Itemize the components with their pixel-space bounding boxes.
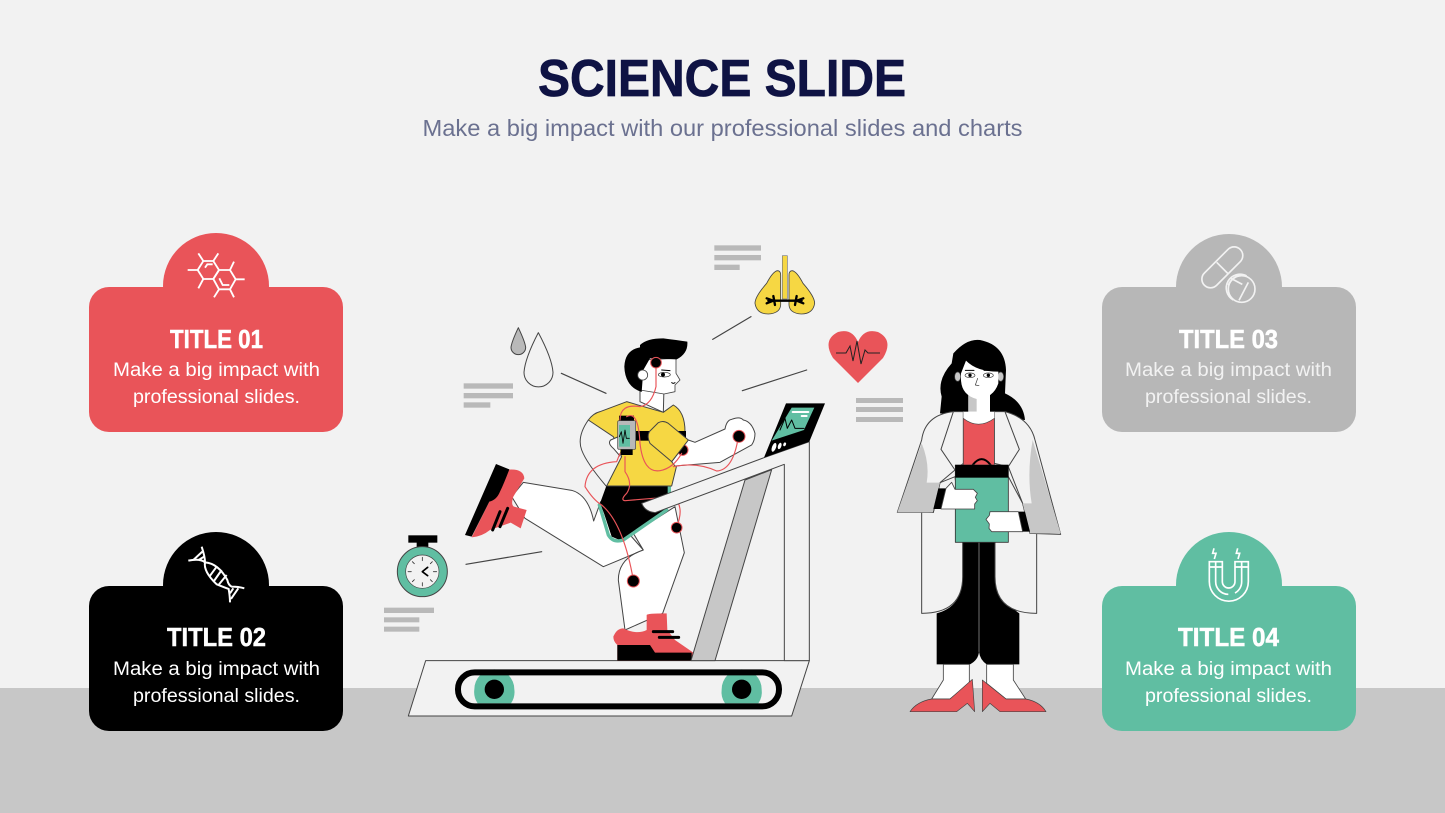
back arm (580, 420, 643, 550)
ear (638, 370, 648, 380)
text block: professional slides. (1145, 686, 1312, 707)
shirt (963, 412, 994, 468)
text placeholder: water (464, 383, 513, 408)
heading: TITLE 02 (167, 622, 266, 652)
shorts (599, 485, 672, 542)
front shoe (613, 613, 693, 661)
icon: heart (829, 331, 887, 383)
panel: title 02 (89, 532, 343, 731)
neck (968, 390, 990, 417)
belt (458, 672, 779, 706)
icon: water drops (511, 328, 553, 387)
illustration: doctor (897, 340, 1061, 712)
trousers (937, 542, 1019, 664)
standing leg (618, 507, 684, 630)
panel: title 04 (1102, 532, 1356, 731)
connector lines (466, 317, 807, 564)
electrode: elbow (677, 445, 688, 455)
forearm and fist (672, 418, 755, 466)
raised leg (512, 482, 643, 567)
panel: title 01 (89, 233, 343, 432)
wheel: front (721, 669, 762, 703)
text block (1125, 659, 1332, 707)
icon: stopwatch (397, 535, 447, 597)
floor (0, 688, 1445, 813)
text block: professional slides. (133, 686, 300, 707)
back hand (609, 436, 620, 456)
hair (940, 340, 1025, 420)
lapels (941, 412, 1019, 470)
icon: dna (188, 547, 244, 602)
left hand (933, 482, 977, 509)
panel: title 03 (1102, 234, 1356, 432)
icon: magnet (1209, 548, 1248, 601)
text block (113, 659, 320, 707)
icon: pills (1198, 243, 1255, 302)
electrode wires (585, 363, 738, 580)
ankles (932, 664, 1026, 699)
text placeholder: heart (856, 398, 903, 422)
neck (640, 380, 664, 412)
treadmill console (764, 403, 825, 458)
illustration: treadmill and runner (384, 245, 825, 716)
title: SCIENCE SLIDE (538, 50, 906, 108)
wheel: rear (474, 669, 515, 703)
treadmill upright (642, 442, 809, 661)
text block: Make a big impact with (1125, 360, 1332, 381)
text block: Make a big impact with (113, 659, 320, 680)
sleeve (648, 421, 688, 462)
shirt (588, 402, 685, 486)
text block: Make a big impact with (113, 360, 320, 381)
text block (1125, 360, 1332, 408)
heels (910, 679, 1046, 712)
heading: TITLE 03 (1179, 324, 1278, 354)
lab coat (897, 412, 1061, 613)
clipboard (955, 459, 1008, 542)
text block: Make a big impact with (1125, 659, 1332, 680)
text block: professional slides. (133, 387, 300, 408)
face (640, 358, 680, 394)
icon: lungs (755, 256, 815, 314)
heading: TITLE 01 (170, 324, 263, 354)
runner (465, 338, 755, 661)
text placeholder: lungs (714, 245, 761, 270)
subtitle: Make a big impact with our professional slides and charts (422, 115, 1022, 141)
electrodes (627, 357, 745, 587)
treadmill base (408, 661, 809, 716)
right hand (986, 512, 1030, 532)
text block: professional slides. (1145, 387, 1312, 408)
chest strap (633, 431, 686, 441)
face (955, 361, 1004, 399)
wearable device (618, 416, 636, 455)
rear shoe (465, 464, 527, 537)
hair (624, 338, 687, 392)
trouser seam (978, 542, 980, 652)
text placeholder: stopwatch (384, 608, 434, 632)
heading: TITLE 04 (1178, 622, 1279, 652)
text block (113, 360, 320, 408)
icon: molecule (188, 253, 245, 297)
eye (658, 370, 675, 383)
